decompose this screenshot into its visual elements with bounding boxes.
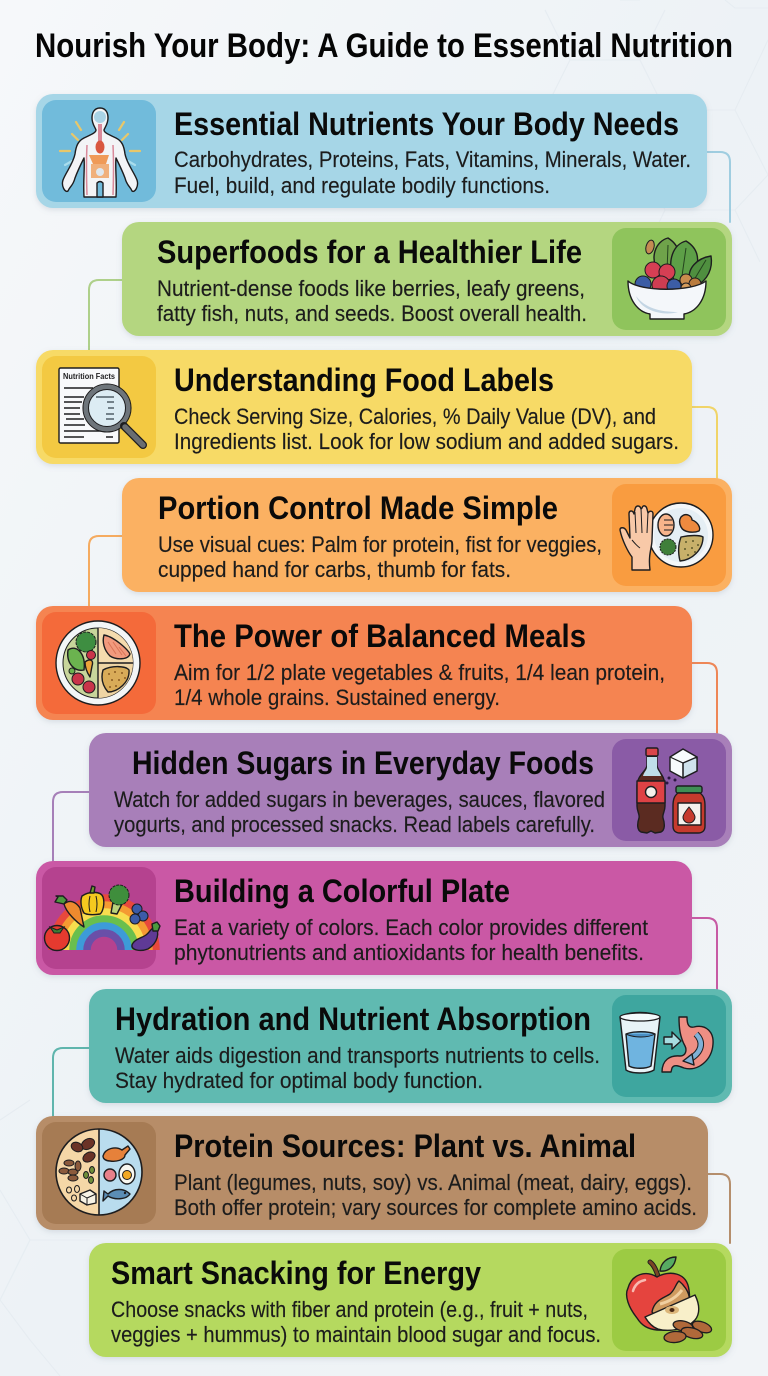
icon: nutrition label and magnifier [59,368,143,445]
icon: superfood bowl [628,238,711,319]
icon: nutrition label and magnifier: Nutrition Facts [63,372,116,381]
panel: portion control [122,478,732,592]
text block [158,532,602,582]
text block: yogurts, and processed snacks. Read labels carefully. [114,812,595,837]
panel: superfoods [122,222,732,336]
text block: Eat a variety of colors. Each color provides different [174,915,649,940]
connector: colorful plate to hydration [692,918,717,989]
text block [174,147,691,198]
text block [174,1170,697,1220]
text block: 1/4 whole grains. Sustained energy. [174,685,500,710]
icon: vegetable rainbow [44,885,160,950]
text block: cupped hand for carbs, thumb for fats. [158,557,511,582]
heading: Smart Snacking for Energy [111,1255,481,1291]
heading: Hydration and Nutrient Absorption [115,1001,591,1037]
icon: human body [60,108,140,197]
icon: hand and plate [620,503,713,570]
heading: Essential Nutrients Your Body Needs [174,106,679,142]
connector: portions to balanced meals [89,536,122,606]
icon: balanced plate [56,621,140,705]
panel: smart snacking [89,1243,732,1357]
text block: Both offer protein; vary sources for complete amino acids. [174,1195,697,1220]
text block: fatty fish, nuts, and seeds. Boost overall health. [157,301,587,326]
text block [174,915,649,965]
panel: hidden sugars [89,733,732,847]
icon: water glass and stomach [620,1012,713,1073]
text block [174,660,665,710]
text block [174,404,679,454]
connector: labels to portions [692,407,717,478]
heading: The Power of Balanced Meals [174,618,586,654]
text block [111,1297,601,1347]
text block: Nutrient-dense foods like berries, leafy greens, [157,276,585,301]
connector: sugars to colorful plate [53,792,89,861]
text block [114,787,605,837]
text block: veggies + hummus) to maintain blood sugar and focus. [111,1322,601,1347]
text block: Fuel, build, and regulate bodily functions. [174,173,550,198]
heading: Understanding Food Labels [174,362,554,398]
heading: Portion Control Made Simple [158,490,558,526]
panel: food labels [36,350,692,464]
icon: soda, sugar cube and jam [637,748,705,833]
text block: phytonutrients and antioxidants for health benefits. [174,940,644,965]
panel: essential nutrients [36,94,707,208]
text block: Ingredients list. Look for low sodium and added sugars. [174,429,679,454]
panel: protein sources [36,1116,708,1230]
heading: Building a Colorful Plate [174,873,510,909]
text block: Use visual cues: Palm for protein, fist for veggies, [158,532,602,557]
connector: balanced meals to sugars [692,663,717,733]
text block: Watch for added sugars in beverages, sauces, flavored [114,787,605,812]
icon: apple and almonds [627,1257,713,1343]
heading: Protein Sources: Plant vs. Animal [174,1128,636,1164]
text block: Carbohydrates, Proteins, Fats, Vitamins, Minerals, Water. [174,147,691,172]
panel: colorful plate [36,861,692,975]
heading: Superfoods for a Healthier Life [157,234,582,270]
connector: hydration to protein [53,1048,89,1116]
text block: Water aids digestion and transports nutrients to cells. [115,1043,600,1068]
text block: Check Serving Size, Calories, % Daily Value (DV), and [174,404,656,429]
heading: Hidden Sugars in Everyday Foods [132,745,594,781]
panel: hydration [89,989,732,1103]
text block [115,1043,600,1093]
text block [157,276,587,326]
panel: balanced meals [36,606,692,720]
connector: protein to snacking [708,1174,730,1243]
text block: Stay hydrated for optimal body function. [115,1068,483,1093]
text block: Choose snacks with fiber and protein (e.g., fruit + nuts, [111,1297,588,1322]
connector: superfoods to labels [89,280,122,350]
text block: Aim for 1/2 plate vegetables & fruits, 1/4 lean protein, [174,660,665,685]
icon: plant and animal protein plate [56,1129,142,1215]
connector: nutrients to superfoods [707,152,730,222]
text block: Plant (legumes, nuts, soy) vs. Animal (meat, dairy, eggs). [174,1170,692,1195]
